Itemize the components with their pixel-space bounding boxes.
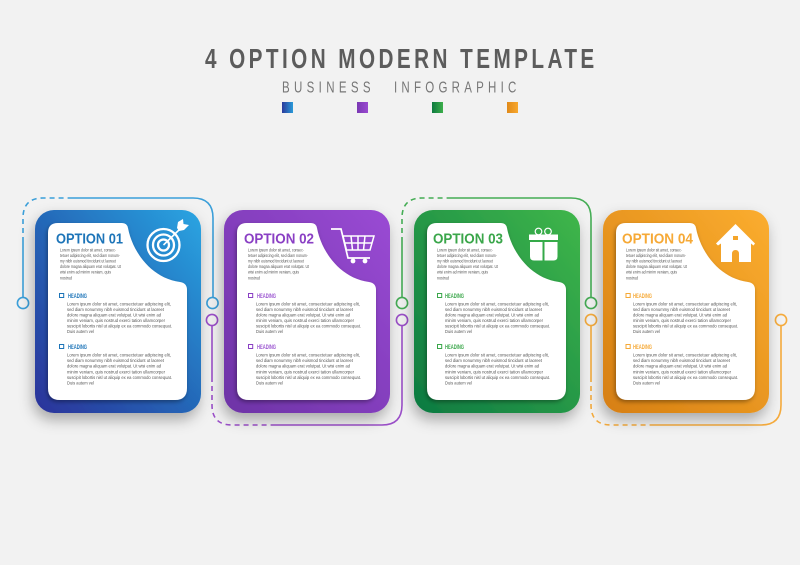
paragraph two: dolore magna aliquam erat volutpat. Ut wisi enim ad [67,364,161,370]
paragraph one: Duis autem vel [445,329,472,335]
paragraph one: Duis autem vel [256,329,283,335]
intro text: Lorem ipsum dolor sit amet, consec- [437,248,493,254]
intro text: tetuer adipiscing elit, sed diam nonum- [60,253,120,259]
intro text: dolore magna aliquam erat volutpat. Ut [626,264,687,270]
subtitle [282,78,516,96]
bullet heading one [438,293,464,300]
paragraph two [445,352,550,386]
paragraph one: sed diam nonummy nibh euismod tincidunt ut laoreet [633,307,731,313]
bullet heading two [248,344,276,351]
white content card [48,223,187,400]
bullet heading one [248,293,276,300]
white content card [237,223,376,400]
heading: option 01: OPTION 01 [56,232,123,248]
paragraph one: dolore magna aliquam erat volutpat. Ut wisi enim ad [633,312,727,318]
paragraph two: Lorem ipsum dolor sit amet, consectetuer adipiscing elit, [445,352,549,358]
paragraph two: sed diam nonummy nibh euismod tincidunt ut laoreet [256,358,354,364]
paragraph two: sed diam nonummy nibh euismod tincidunt ut laoreet [445,358,543,364]
paragraph one: minim veniam, quis nostrud exerci tation ullamcorper [445,318,543,324]
paragraph one: suscipit lobortis nisl ut aliquip ex ea commodo consequat. [445,324,550,330]
paragraph one: suscipit lobortis nisl ut aliquip ex ea commodo consequat. [633,324,738,330]
intro text [626,248,687,282]
intro text: my nibh euismod tincidunt ut laoreet [626,258,682,264]
bullet heading two [626,344,652,351]
bullet heading two: HEADING [633,344,652,351]
paragraph two: sed diam nonummy nibh euismod tincidunt ut laoreet [633,358,731,364]
intro text: nostrud [437,276,449,282]
bullet heading two: HEADING [68,344,87,351]
paragraph one: minim veniam, quis nostrud exerci tation ullamcorper [67,318,165,324]
connector: green [396,198,597,309]
icon: house [716,224,755,262]
bullet heading one [60,293,87,300]
paragraph one: suscipit lobortis nisl ut aliquip ex ea commodo consequat. [67,324,172,330]
panel: option 02 [224,210,390,413]
paragraph two: suscipit lobortis nisl ut aliquip ex ea commodo consequat. [67,375,172,381]
panel: option 03 [414,210,580,413]
intro text: Lorem ipsum dolor sit amet, consec- [248,248,304,254]
intro text: nostrud [248,276,260,282]
paragraph one: dolore magna aliquam erat volutpat. Ut wisi enim ad [445,312,539,318]
paragraph one: Lorem ipsum dolor sit amet, consectetuer adipiscing elit, [445,302,549,308]
intro text: nostrud [60,276,72,282]
panel: option 01 [35,210,201,413]
intro text: dolore magna aliquam erat volutpat. Ut [60,264,121,270]
intro text: dolore magna aliquam erat volutpat. Ut [248,264,309,270]
paragraph one: suscipit lobortis nisl ut aliquip ex ea commodo consequat. [256,324,361,330]
paragraph one: Duis autem vel [67,329,94,335]
icon: shopping cart [331,229,374,263]
intro text [60,248,121,282]
heading: option 02: OPTION 02 [244,232,314,248]
paragraph one [445,302,550,335]
paragraph one: Lorem ipsum dolor sit amet, consectetuer adipiscing elit, [256,302,360,308]
paragraph two: dolore magna aliquam erat volutpat. Ut wisi enim ad [445,364,539,370]
bullet heading two [438,344,464,351]
paragraph two: Duis autem vel [445,380,472,386]
paragraph two: Lorem ipsum dolor sit amet, consectetuer adipiscing elit, [633,352,737,358]
paragraph two: dolore magna aliquam erat volutpat. Ut wisi enim ad [633,364,727,370]
intro text: tetuer adipiscing elit, sed diam nonum- [248,253,308,259]
connector: blue [17,198,218,309]
intro text: nostrud [626,276,638,282]
paragraph two: dolore magna aliquam erat volutpat. Ut wisi enim ad [256,364,350,370]
paragraph two: minim veniam, quis nostrud exerci tation ullamcorper [256,370,354,376]
connector: orange [585,314,787,425]
title: 4 OPTION MODERN TEMPLATE [205,44,594,75]
paragraph two: minim veniam, quis nostrud exerci tation ullamcorper [67,370,165,376]
intro text: my nibh euismod tincidunt ut laoreet [60,258,116,264]
bullet heading two: HEADING [445,344,464,351]
paragraph one: sed diam nonummy nibh euismod tincidunt ut laoreet [445,307,543,313]
paragraph two: suscipit lobortis nisl ut aliquip ex ea commodo consequat. [445,375,550,381]
paragraph one [67,302,172,335]
paragraph one: Lorem ipsum dolor sit amet, consectetuer adipiscing elit, [67,302,171,308]
intro text: Lorem ipsum dolor sit amet, consec- [60,248,116,254]
bullet heading one [626,293,652,300]
paragraph two: Duis autem vel [256,380,283,386]
paragraph two: minim veniam, quis nostrud exerci tation ullamcorper [633,370,731,376]
bullet heading two: HEADING [257,344,276,351]
intro text: my nibh euismod tincidunt ut laoreet [248,258,304,264]
bullet heading one: HEADING [257,293,276,300]
bullet heading two [60,344,87,351]
connector: purple [206,314,408,425]
intro text: my nibh euismod tincidunt ut laoreet [437,258,493,264]
paragraph two: suscipit lobortis nisl ut aliquip ex ea commodo consequat. [256,375,361,381]
bullet heading one: HEADING [68,293,87,300]
paragraph one: minim veniam, quis nostrud exerci tation ullamcorper [633,318,731,324]
paragraph two: minim veniam, quis nostrud exerci tation ullamcorper [445,370,543,376]
paragraph one: minim veniam, quis nostrud exerci tation ullamcorper [256,318,354,324]
intro text: tetuer adipiscing elit, sed diam nonum- [626,253,686,259]
intro text: wisi enim ad minim veniam, quis [626,270,677,276]
paragraph two [67,352,172,386]
paragraph two: suscipit lobortis nisl ut aliquip ex ea commodo consequat. [633,375,738,381]
paragraph one: sed diam nonummy nibh euismod tincidunt ut laoreet [256,307,354,313]
icon: target with arrow [148,219,189,261]
bullet heading one: HEADING [633,293,652,300]
icon: gift box [529,228,558,260]
paragraph two: Lorem ipsum dolor sit amet, consectetuer adipiscing elit, [256,352,360,358]
white content card [616,223,755,400]
paragraph one: Lorem ipsum dolor sit amet, consectetuer adipiscing elit, [633,302,737,308]
paragraph one: dolore magna aliquam erat volutpat. Ut wisi enim ad [67,312,161,318]
intro text: tetuer adipiscing elit, sed diam nonum- [437,253,497,259]
intro text: wisi enim ad minim veniam, quis [437,270,488,276]
intro text [248,248,309,282]
paragraph two: sed diam nonummy nibh euismod tincidunt ut laoreet [67,358,165,364]
paragraph two [256,352,361,386]
paragraph one: dolore magna aliquam erat volutpat. Ut wisi enim ad [256,312,350,318]
white content card [427,223,566,400]
subtitle: BUSINESS [282,78,371,96]
subtitle: INFOGRAPHIC [394,78,516,96]
panel: option 04 [603,210,769,413]
paragraph two: Duis autem vel [633,380,660,386]
paragraph two [633,352,738,386]
intro text: dolore magna aliquam erat volutpat. Ut [437,264,498,270]
heading: option 04: OPTION 04 [622,232,693,248]
colour key squares [282,102,518,113]
paragraph one [256,302,361,335]
heading: option 03: OPTION 03 [433,232,503,248]
intro text [437,248,498,282]
intro text: Lorem ipsum dolor sit amet, consec- [626,248,682,254]
paragraph two: Duis autem vel [67,380,94,386]
intro text: wisi enim ad minim veniam, quis [248,270,299,276]
paragraph one [633,302,738,335]
intro text: wisi enim ad minim veniam, quis [60,270,111,276]
paragraph one: Duis autem vel [633,329,660,335]
bullet heading one: HEADING [445,293,464,300]
paragraph one: sed diam nonummy nibh euismod tincidunt ut laoreet [67,307,165,313]
paragraph two: Lorem ipsum dolor sit amet, consectetuer adipiscing elit, [67,352,171,358]
